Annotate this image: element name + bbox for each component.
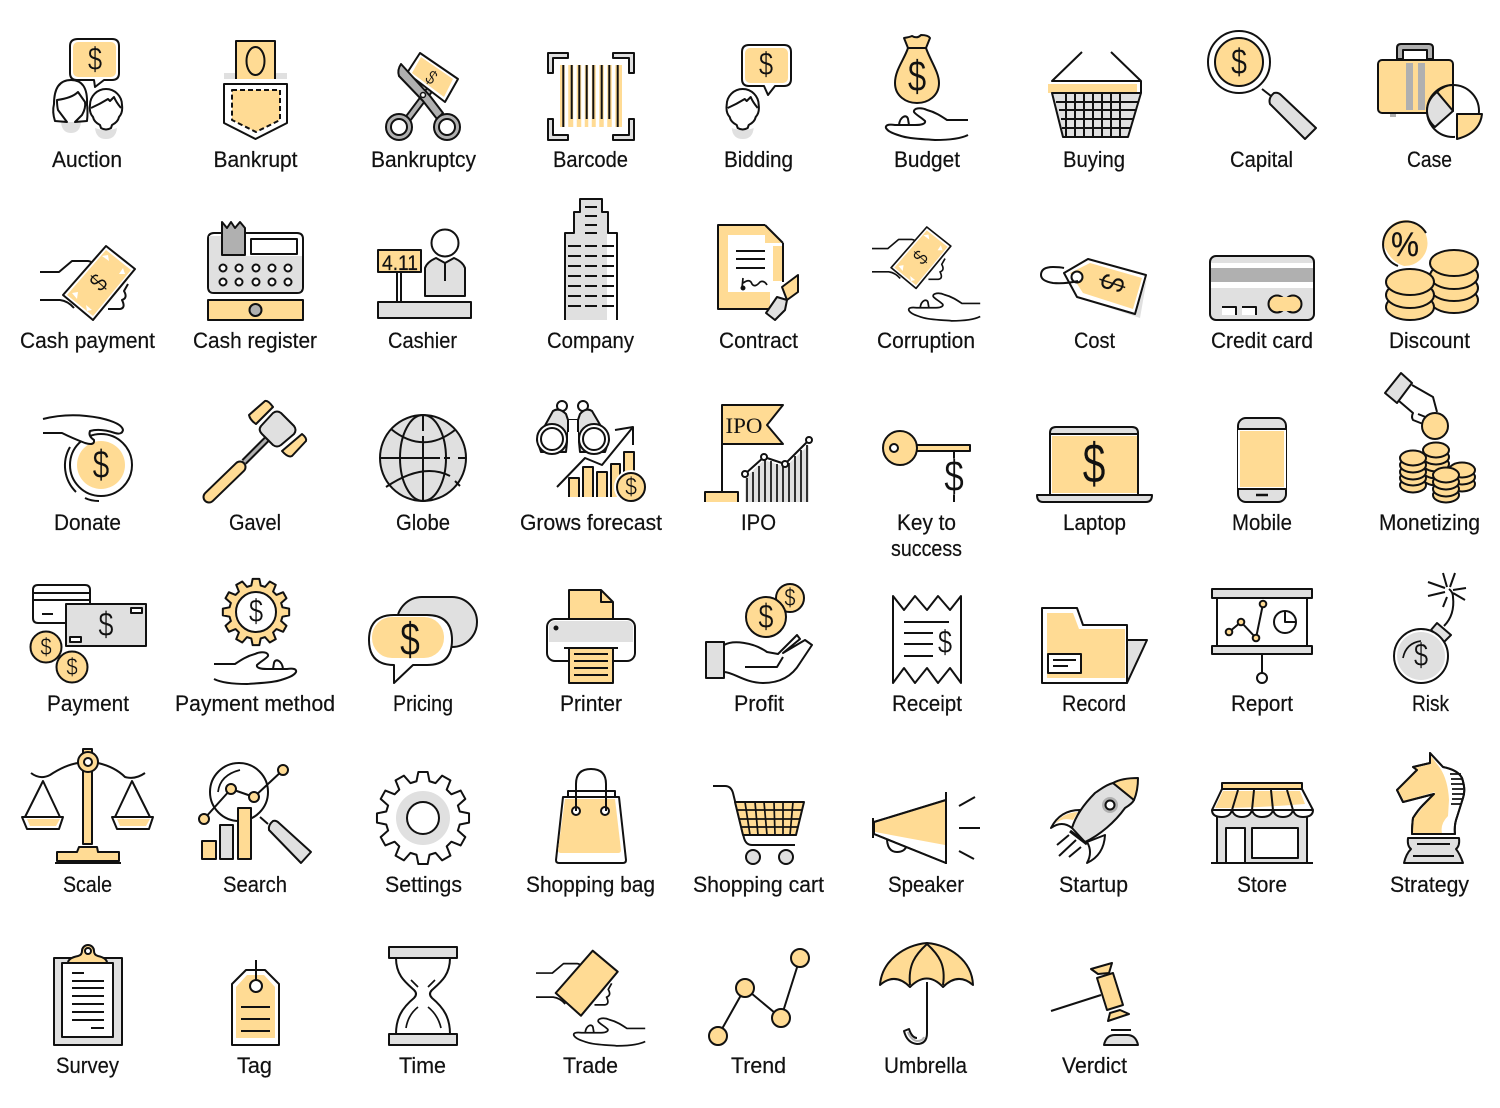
label: Printer: Printer bbox=[560, 691, 622, 716]
label: Auction: Auction bbox=[52, 147, 122, 172]
label: Payment: Payment bbox=[47, 691, 129, 716]
icon: Bankruptcy bbox=[386, 53, 460, 140]
icon: Bidding: $ bbox=[759, 47, 773, 83]
label: Credit card: Credit card bbox=[1211, 328, 1313, 353]
icon: Capital bbox=[1208, 31, 1316, 139]
icon: Cost: $ bbox=[1092, 270, 1134, 297]
icon: Mobile bbox=[1238, 418, 1286, 502]
icon: Payment bbox=[30, 585, 146, 682]
icon: Barcode bbox=[548, 53, 634, 140]
icon: Monetizing bbox=[1385, 373, 1475, 502]
label: Receipt: Receipt bbox=[892, 691, 962, 716]
label: Key to success line 2: success bbox=[891, 536, 962, 561]
icon: Shopping cart bbox=[713, 786, 804, 864]
label: Umbrella: Umbrella bbox=[884, 1053, 968, 1078]
icon: Cashier bbox=[378, 230, 471, 318]
label: Gavel: Gavel bbox=[229, 510, 281, 535]
label: Mobile: Mobile bbox=[1232, 510, 1292, 535]
icon: Risk bbox=[1394, 573, 1466, 683]
label: Cost: Cost bbox=[1074, 328, 1115, 353]
icon: Scale bbox=[22, 749, 153, 863]
icon: Bankrupt bbox=[224, 41, 287, 139]
icon: Laptop: $ bbox=[1083, 431, 1105, 496]
label: Barcode: Barcode bbox=[553, 147, 628, 172]
label: Cashier: Cashier bbox=[388, 328, 457, 353]
icon: Store bbox=[1211, 783, 1313, 863]
icon: Settings bbox=[377, 772, 469, 864]
label: Key to success: Key to bbox=[897, 510, 956, 535]
label: Strategy: Strategy bbox=[1390, 872, 1469, 897]
label: Budget: Budget bbox=[894, 147, 960, 172]
icon: Payment: $ bbox=[98, 605, 114, 644]
icon: Profit: $ bbox=[758, 597, 774, 636]
icon: Receipt: $ bbox=[938, 625, 952, 661]
icon: Risk: $ bbox=[1414, 638, 1428, 674]
icon: Time bbox=[389, 947, 457, 1045]
label: Trend: Trend bbox=[731, 1053, 786, 1078]
icon: Cashier: 4.11 bbox=[382, 252, 418, 275]
label: Cash register: Cash register bbox=[193, 328, 317, 353]
label: Capital: Capital bbox=[1230, 147, 1293, 172]
icon: Pricing: $ bbox=[400, 614, 420, 665]
icon: Profit: $ bbox=[784, 584, 796, 612]
label: Globe: Globe bbox=[396, 510, 450, 535]
icon: Laptop bbox=[1037, 427, 1152, 502]
icon: Corruption bbox=[872, 227, 980, 321]
icon: Record bbox=[1042, 608, 1147, 683]
icon: Case bbox=[1378, 44, 1485, 142]
icon: Company bbox=[565, 199, 617, 320]
icon: Corruption: $ bbox=[909, 246, 933, 270]
label: Tag: Tag bbox=[237, 1053, 272, 1078]
icon: Umbrella bbox=[880, 943, 973, 1044]
icon: Cash payment: $ bbox=[84, 268, 114, 297]
label: Survey: Survey bbox=[56, 1053, 119, 1078]
icon: Printer bbox=[547, 590, 635, 683]
icon: IPO: IPO bbox=[726, 413, 762, 438]
label: Discount: Discount bbox=[1389, 328, 1470, 353]
icon: Buying bbox=[1048, 52, 1141, 137]
icon: Payment method: $ bbox=[249, 594, 263, 630]
label: Laptop: Laptop bbox=[1063, 510, 1126, 535]
icon: Speaker bbox=[873, 792, 980, 864]
label: Case: Case bbox=[1407, 147, 1452, 172]
label: Verdict: Verdict bbox=[1062, 1053, 1127, 1078]
label: Report: Report bbox=[1231, 691, 1293, 716]
icon: Discount: % bbox=[1391, 226, 1419, 264]
label: Buying: Buying bbox=[1063, 147, 1125, 172]
label: Risk: Risk bbox=[1412, 691, 1450, 716]
icon: Bidding bbox=[726, 45, 791, 139]
icon: Budget bbox=[886, 35, 968, 140]
icon: Donate bbox=[43, 415, 132, 501]
icon: Gavel bbox=[209, 401, 306, 497]
label: IPO: IPO bbox=[741, 510, 776, 535]
label: Corruption: Corruption bbox=[877, 328, 975, 353]
icon: Bankruptcy: $ bbox=[421, 66, 441, 89]
label: Pricing: Pricing bbox=[393, 691, 453, 716]
label: Cash payment: Cash payment bbox=[20, 328, 155, 353]
icon: Cost bbox=[1041, 259, 1147, 318]
label: Grows forecast: Grows forecast bbox=[520, 510, 662, 535]
icon: Payment: $ bbox=[40, 633, 52, 660]
icon: Budget: $ bbox=[908, 53, 926, 101]
icon: Donate: $ bbox=[93, 443, 110, 487]
label: Company: Company bbox=[547, 328, 634, 353]
label: Speaker: Speaker bbox=[888, 872, 964, 897]
icon: Startup bbox=[1051, 778, 1138, 863]
label: Search: Search bbox=[223, 872, 287, 897]
icon: Verdict bbox=[1051, 963, 1138, 1045]
icon: Grows forecast: $ bbox=[625, 472, 637, 500]
icon: Strategy bbox=[1397, 753, 1464, 863]
label: Shopping bag: Shopping bag bbox=[526, 872, 655, 897]
icon: Pricing bbox=[369, 597, 477, 683]
label: Contract: Contract bbox=[719, 328, 798, 353]
label: Shopping cart: Shopping cart bbox=[693, 872, 824, 897]
icon: Receipt bbox=[893, 596, 961, 683]
label: Bidding: Bidding bbox=[724, 147, 793, 172]
icon: Auction bbox=[53, 39, 122, 139]
icon: Search bbox=[199, 763, 311, 863]
label: Bankruptcy: Bankruptcy bbox=[371, 147, 476, 172]
label: Record: Record bbox=[1062, 691, 1126, 716]
icon: Survey bbox=[54, 945, 122, 1045]
icon: Report bbox=[1212, 589, 1312, 683]
label: Startup: Startup bbox=[1059, 872, 1128, 897]
label: Profit: Profit bbox=[734, 691, 784, 716]
icon: Credit card bbox=[1210, 256, 1314, 320]
label: Trade: Trade bbox=[563, 1053, 618, 1078]
label: Monetizing: Monetizing bbox=[1379, 510, 1480, 535]
label: Settings: Settings bbox=[385, 872, 462, 897]
label: Bankrupt: Bankrupt bbox=[214, 147, 298, 172]
label: Payment method: Payment method bbox=[175, 691, 335, 716]
icon: Auction: $ bbox=[88, 42, 102, 78]
label: Store: Store bbox=[1237, 872, 1287, 897]
label: Time: Time bbox=[399, 1053, 446, 1078]
icon: Cash register bbox=[208, 222, 303, 320]
icon: Payment: $ bbox=[66, 653, 78, 680]
icon: Trade bbox=[536, 951, 645, 1046]
icon: IPO bbox=[705, 405, 812, 502]
icon: Payment method bbox=[214, 579, 296, 684]
icon: Cash payment bbox=[40, 246, 135, 320]
icon: Profit bbox=[706, 584, 812, 683]
icon: Trend bbox=[709, 949, 809, 1045]
icon: Contract bbox=[718, 225, 798, 320]
icon: Shopping bag bbox=[556, 769, 626, 863]
icon: Globe bbox=[380, 415, 466, 501]
label: Donate: Donate bbox=[54, 510, 121, 535]
icon: Capital: $ bbox=[1231, 41, 1247, 82]
icon: Discount bbox=[1383, 220, 1478, 320]
icon: Tag bbox=[232, 960, 279, 1045]
icon: Key to success bbox=[883, 431, 970, 502]
icon: Key to success: $ bbox=[944, 452, 964, 501]
icon: Grows forecast bbox=[537, 401, 648, 504]
label: Scale: Scale bbox=[63, 872, 112, 897]
